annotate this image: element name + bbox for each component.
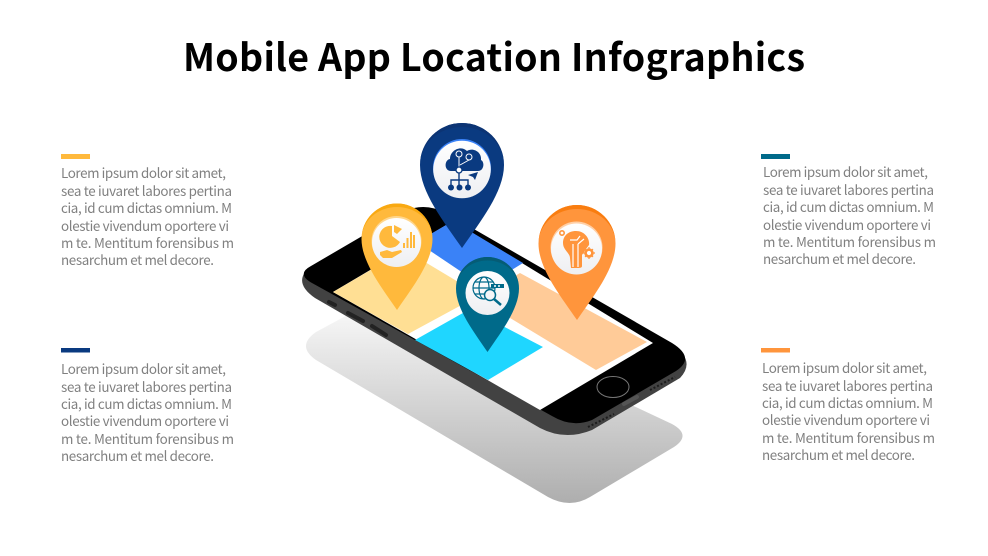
phone face	[304, 207, 685, 423]
text block: top left: m te. Mentitum forensibus m	[61, 232, 234, 252]
accent bar: yellow	[61, 154, 90, 159]
panel: top left text	[61, 154, 234, 269]
title: Mobile App Location Infographics	[183, 27, 805, 82]
text block: top left: Lorem ipsum dolor sit amet,	[61, 162, 226, 182]
text block: bottom left: nesarchum et mel decore.	[61, 445, 214, 465]
text block: top right: nesarchum et mel decore.	[763, 248, 916, 268]
text block: bottom left: cia, id cum dictas omnium. M	[61, 393, 232, 413]
map block: cyan	[415, 309, 543, 380]
text block: top right	[763, 161, 936, 268]
pin: teal web search	[456, 257, 519, 352]
text block: bottom right: Lorem ipsum dolor sit amet,	[762, 357, 927, 377]
text block: bottom left: m te. Mentitum forensibus m	[61, 428, 234, 448]
text block: top right: Lorem ipsum dolor sit amet,	[763, 161, 928, 181]
accent bar: teal	[761, 154, 790, 159]
text block: top right: olestie vivendum oportere vi	[763, 214, 931, 234]
phone shadow	[306, 292, 683, 503]
pin: yellow chart	[362, 204, 432, 310]
text block: top left: sea te iuvaret labores pertina	[61, 180, 232, 200]
text block: bottom right: cia, id cum dictas omnium. M	[762, 392, 933, 412]
text block: top right: sea te iuvaret labores pertina	[763, 179, 934, 199]
accent bar: navy	[61, 348, 90, 352]
panel: bottom right text	[761, 348, 935, 464]
text block: bottom left	[61, 358, 234, 465]
map block: yellow	[333, 250, 480, 334]
text block: bottom right: olestie vivendum oportere vi	[762, 409, 930, 429]
phone illustration	[302, 207, 687, 435]
panel: top right text	[761, 154, 936, 268]
map block: peach	[477, 273, 647, 370]
panel: bottom left text	[61, 348, 234, 465]
speaker grille and port	[588, 377, 675, 427]
accent bar: orange	[761, 348, 790, 352]
text block: bottom left: olestie vivendum oportere vi	[61, 410, 229, 430]
text block: top left: cia, id cum dictas omnium. M	[61, 197, 232, 217]
text block: bottom right	[762, 357, 935, 464]
icon: globe with magnifier	[473, 277, 504, 305]
home button	[597, 376, 629, 398]
text block: top left: olestie vivendum oportere vi	[61, 215, 229, 235]
text block: bottom right: sea te iuvaret labores pertina	[762, 375, 933, 395]
phone screen	[333, 221, 653, 410]
pin: orange light bulb	[538, 205, 616, 320]
text block: bottom left: Lorem ipsum dolor sit amet,	[61, 358, 226, 378]
text block: top right: m te. Mentitum forensibus m	[763, 231, 936, 251]
pin: navy cloud network	[420, 123, 504, 248]
text block: bottom right: m te. Mentitum forensibus m	[762, 427, 935, 447]
text block: bottom left: sea te iuvaret labores pertina	[61, 376, 232, 396]
map block: blue	[417, 221, 523, 287]
icon: light bulb with gears	[560, 231, 595, 268]
phone body	[302, 208, 687, 435]
icon: cloud network	[446, 148, 483, 190]
text block: top left	[61, 162, 234, 269]
text block: top right: cia, id cum dictas omnium. M	[763, 196, 934, 216]
text block: bottom right: nesarchum et mel decore.	[762, 444, 915, 464]
icon: pie chart, bars and hand	[379, 225, 415, 258]
text block: top left: nesarchum et mel decore.	[61, 249, 214, 269]
side buttons	[329, 302, 386, 335]
